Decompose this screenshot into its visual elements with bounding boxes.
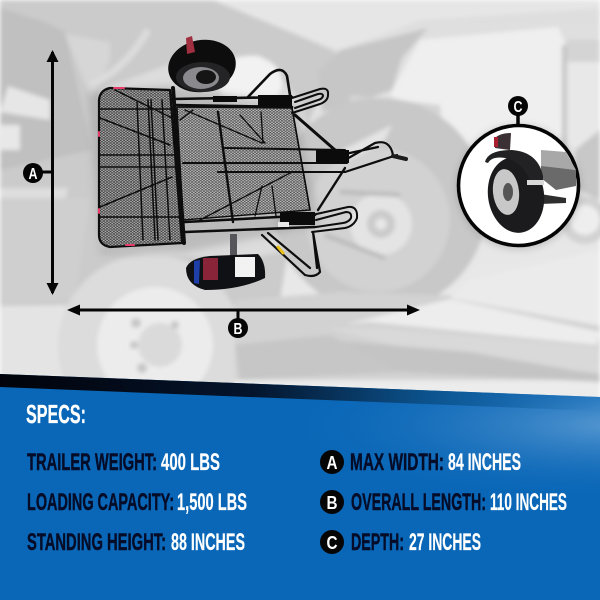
spec B: overall length: B [326, 493, 338, 513]
tail light [495, 133, 511, 150]
motorcycle tail [318, 28, 428, 112]
tread sheen [176, 62, 230, 92]
tire [483, 153, 549, 237]
spec A: max width: MAX WIDTH: [350, 449, 444, 476]
spec A: max width: A [326, 453, 338, 473]
top loading hoop [248, 70, 290, 97]
chrome body [541, 150, 576, 170]
spec: trailer weight: TRAILER WEIGHT: [27, 449, 157, 476]
building wall [390, 27, 566, 175]
big wheel lug holes [130, 318, 179, 373]
motorcycle behind inset [561, 130, 600, 244]
ramp under [235, 335, 400, 380]
motorcycle seat [342, 125, 392, 160]
ramp dark edge [330, 340, 600, 382]
trailer: top-down folding motorcycle trailer [99, 70, 406, 276]
rim [491, 168, 521, 216]
badge A [23, 163, 43, 183]
brake hardware [196, 70, 216, 84]
sprocket inner [375, 218, 387, 230]
badge B [228, 318, 248, 338]
folded ramp below frame [262, 232, 320, 276]
wheel inner [306, 148, 450, 292]
spec B: overall length: OVERALL LENGTH: [351, 489, 486, 516]
bright fender outline [90, 30, 148, 85]
badge C: C [514, 99, 523, 116]
white band at top [213, 0, 600, 50]
badge A: A [28, 166, 38, 183]
car lower stripe [0, 188, 68, 198]
spec C: depth: DEPTH: [351, 529, 404, 556]
badge B: B [234, 321, 242, 338]
tail light [186, 36, 195, 54]
red lens [494, 137, 498, 147]
spec C: depth: C [326, 533, 338, 553]
center ramp tip [393, 156, 406, 159]
yellow marker [278, 247, 283, 253]
spec: trailer weight: 400 LBS [161, 449, 220, 476]
basket/deck hinge [173, 88, 184, 243]
deck cross braces [180, 110, 292, 220]
spec: standing height: 88 INCHES [171, 529, 245, 556]
axle [540, 194, 566, 204]
ramp tread [328, 328, 600, 372]
blue specs panel [0, 374, 600, 600]
tire [164, 34, 240, 98]
diagonal strut [295, 115, 335, 150]
spec: loading capacity: LOADING CAPACITY: [27, 489, 174, 516]
hub [183, 67, 219, 89]
bright rack area [100, 55, 340, 260]
sprocket hub [367, 210, 395, 238]
inset stem [516, 112, 520, 126]
center ramp loop [345, 142, 397, 172]
ramp surface [346, 299, 600, 345]
heading: SPECS: [26, 399, 86, 429]
bottom wheel [186, 234, 265, 290]
tail light [203, 258, 218, 280]
top wheel [164, 34, 240, 98]
dark top stripe [0, 374, 600, 411]
basket bars [100, 90, 180, 240]
sprocket [350, 193, 412, 255]
badge C [508, 96, 528, 116]
area under motorcycle [235, 292, 600, 380]
spec C: depth [320, 529, 481, 556]
background photo: grayscale motorcycle and car scene [0, 0, 600, 438]
machinery behind tail [350, 95, 445, 160]
ground left [0, 305, 90, 378]
motorcycle rear tire [273, 98, 487, 312]
tire [186, 254, 265, 290]
big trailer tire [58, 254, 242, 438]
bottom ramp loop [312, 207, 357, 232]
car window [0, 8, 92, 170]
trailer shadow [88, 86, 320, 254]
blue reflector [194, 260, 200, 284]
license plate [0, 125, 20, 150]
big wheel hub [138, 323, 182, 367]
deck spine [218, 112, 233, 222]
axle [230, 234, 237, 256]
car wall panel [65, 34, 110, 100]
light glow [0, 374, 600, 600]
car lower panel [0, 198, 90, 304]
inset shadow [456, 125, 580, 249]
rear basket mesh [99, 88, 182, 247]
ground right [450, 250, 600, 326]
car bumper stripe [0, 86, 50, 120]
top frame rail [172, 97, 292, 107]
lower strut [318, 168, 345, 210]
top ramp loop [292, 89, 328, 113]
chain [325, 192, 400, 258]
spec C: depth: 27 INCHES [409, 529, 481, 556]
spec: standing height: STANDING HEIGHT: [27, 529, 166, 556]
deck right edge [292, 108, 310, 210]
hub [503, 183, 513, 201]
fender [485, 150, 543, 184]
big wheel rim [97, 287, 213, 403]
diamond plate body [541, 165, 576, 190]
dimension arrow A [23, 50, 58, 295]
inset circle [458, 126, 578, 246]
fender plate [235, 257, 255, 277]
center rails [183, 148, 347, 172]
bright patch behind top rail [218, 56, 282, 108]
white latch [278, 222, 289, 227]
dimension arrow B [67, 304, 420, 338]
panel fill [0, 374, 600, 600]
bottom frame rail [185, 215, 315, 232]
right building [562, 40, 600, 212]
hardware blocks [213, 95, 349, 227]
deck mesh [177, 107, 310, 220]
spec A: max width: 84 INCHES [448, 449, 521, 476]
parked car [0, 0, 336, 312]
pink reflectors [99, 88, 134, 245]
inset callout C [456, 96, 580, 249]
mud flap [527, 180, 544, 185]
spec: loading capacity: 1,500 LBS [177, 489, 247, 516]
